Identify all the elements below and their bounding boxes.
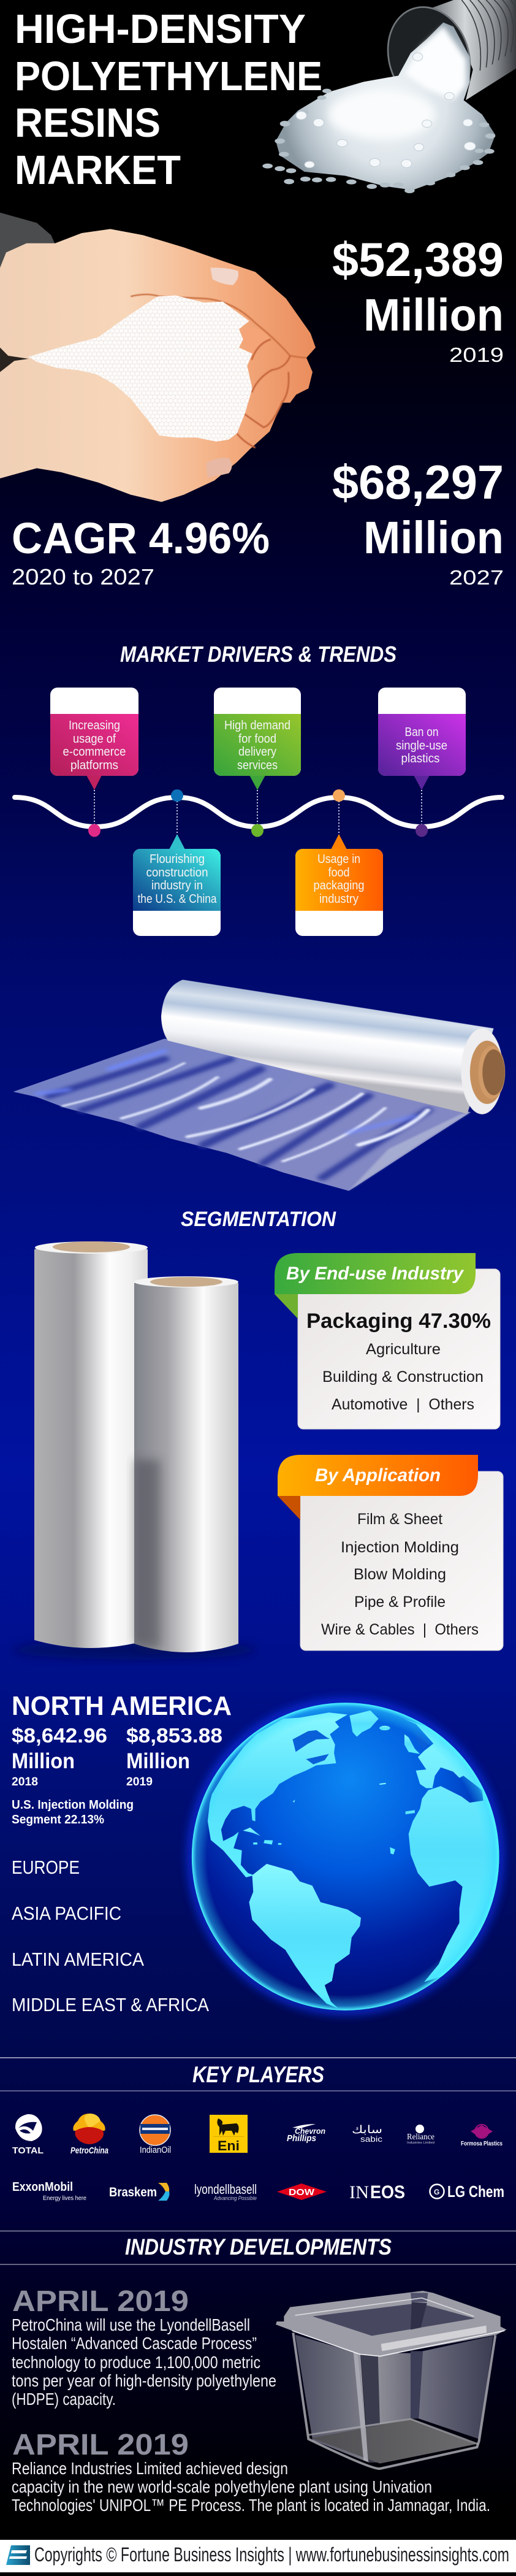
text: north america stats: $8,853.88 <box>126 1724 222 1747</box>
card: plastics ban: single-use <box>396 739 447 753</box>
card: food delivery: for food <box>238 732 276 746</box>
text: development two: APRIL 2019 <box>12 2429 189 2461</box>
panel: by application: Film & Sheet <box>357 1511 442 1528</box>
stat: 2019 market size <box>332 232 504 366</box>
logo: Formosa Plastics: Formosa Plastics <box>461 2141 503 2147</box>
logo: sabic: sabic <box>360 2134 383 2144</box>
icon: globe <box>186 1697 509 2016</box>
text: other regions: EUROPE <box>12 1857 80 1878</box>
card: construction: the U.S. & China <box>137 892 217 906</box>
logo: Eni <box>210 2115 248 2153</box>
text: development one: (HDPE) capacity. <box>12 2390 116 2409</box>
card: food delivery <box>214 688 301 790</box>
stat: 2027 market size: $68,297 <box>332 455 504 509</box>
card: e-commerce: e-commerce <box>63 745 126 759</box>
logo: LyondellBasell: Advancing Possible <box>213 2195 257 2201</box>
text: north america stats: NORTH AMERICA <box>12 1691 232 1721</box>
stat: 2027 market size <box>332 455 504 589</box>
bright pellet highlights <box>296 53 476 168</box>
logo: INEOS: EOS <box>370 2182 405 2202</box>
logo: Chevron Phillips: Chevron <box>295 2126 325 2136</box>
icon: Fortune Business Insights logo <box>6 2545 30 2565</box>
panel: by end-use industry: Automotive | Others <box>332 1396 474 1413</box>
logo: Braskem: Braskem <box>109 2185 157 2199</box>
panel: by application: Injection Molding <box>341 1539 459 1556</box>
card: e-commerce: platforms <box>70 759 118 772</box>
logo: IndianOil <box>140 2115 171 2155</box>
hudson bay <box>292 1730 330 1752</box>
iceland <box>379 1726 390 1730</box>
logo: LyondellBasell: lyondellbasell <box>194 2182 257 2197</box>
text: other regions: MIDDLE EAST & AFRICA <box>12 1994 209 2015</box>
card: food packaging: packaging <box>314 879 364 892</box>
logo: Dow: DOW <box>289 2187 315 2198</box>
stat: 2027 market size: 2027 <box>449 566 504 589</box>
text: other regions: ASIA PACIFIC <box>12 1903 121 1924</box>
panel: by end-use industry: By End-use Industry <box>286 1263 464 1284</box>
stat: CAGR: CAGR 4.96% <box>12 515 270 563</box>
tub walls <box>295 2335 493 2463</box>
north america <box>208 1712 347 1877</box>
logo: Dow <box>277 2183 327 2200</box>
logo: INEOS <box>349 2182 405 2202</box>
logo: sabic <box>352 2123 383 2144</box>
panel: by application <box>278 1455 503 1650</box>
card: food packaging: industry <box>319 892 359 906</box>
stat: 2027 market size: Million <box>363 512 504 563</box>
ribbed cup <box>375 0 516 118</box>
text: development two: Reliance Industries Limited achieved design <box>12 2459 288 2478</box>
logo: Chevron Phillips: Phillips <box>287 2133 316 2144</box>
atlantic islands <box>292 1783 415 1855</box>
logo: LyondellBasell <box>194 2182 257 2201</box>
text: north america stats: Segment 22.13% <box>12 1813 104 1827</box>
text: north america stats: Million <box>12 1749 75 1773</box>
logo: ExxonMobil: Energy lives here <box>43 2195 86 2202</box>
baltic sea <box>417 1736 430 1748</box>
panel: by application: Wire & Cables | Others <box>321 1621 479 1638</box>
logo: Reliance: Industries Limited <box>407 2141 434 2145</box>
card: construction: construction <box>146 866 208 880</box>
logo: PetroChina <box>70 2114 108 2156</box>
card: food delivery: High demand <box>224 719 290 732</box>
text: development one: PetroChina will use the LyondellBasell <box>12 2315 250 2334</box>
logo: Reliance: Reliance <box>407 2133 434 2142</box>
card: food delivery: delivery <box>238 745 276 759</box>
heading: segmentation: SEGMENTATION <box>181 1208 336 1231</box>
image: hands holding white pellets <box>0 213 316 502</box>
card: food packaging: food <box>328 866 349 880</box>
panel: by end-use industry <box>275 1253 500 1429</box>
logo: ExxonMobil: ExxonMobil <box>12 2180 73 2194</box>
text: north america stats: $8,642.96 <box>12 1724 107 1747</box>
text: development one: APRIL 2019 <box>12 2285 189 2318</box>
logo: Chevron Phillips <box>287 2124 325 2144</box>
panel: by end-use industry: Packaging 47.30% <box>306 1309 491 1333</box>
tub floor <box>311 2419 476 2464</box>
stat: CAGR: 2020 to 2027 <box>12 564 154 589</box>
caribbean islands <box>243 1828 281 1845</box>
logos: key players <box>12 2114 504 2202</box>
stat: 2019 market size: Million <box>363 289 504 340</box>
card: food delivery: services <box>237 759 278 772</box>
roll body <box>161 979 494 1114</box>
gulf of st lawrence <box>306 1754 329 1765</box>
card: e-commerce: usage of <box>73 732 116 746</box>
card: construction <box>133 834 221 936</box>
title: HIGH-DENSITY <box>15 6 306 52</box>
unrolled film sheet <box>13 1038 471 1191</box>
logo: Reliance <box>407 2125 434 2145</box>
logo: LG Chem: G <box>434 2188 439 2196</box>
roll end face <box>461 1029 503 1114</box>
stat: 2019 market size: 2019 <box>449 343 504 366</box>
card: e-commerce <box>50 688 138 790</box>
europe and africa <box>403 1719 509 1982</box>
text: north america stats: 2019 <box>126 1776 153 1788</box>
connector lines <box>94 790 422 835</box>
title: MARKET <box>15 147 181 193</box>
text: other regions <box>12 1857 209 2015</box>
title: RESINS <box>15 100 161 146</box>
text: development two: capacity in the new world-scale polyethylene plant using Univation <box>12 2477 432 2496</box>
logo: INEOS: IN <box>349 2182 369 2202</box>
title <box>15 6 322 193</box>
text: development one: tons per year of high-density polyethylene <box>12 2371 276 2390</box>
text: development one <box>12 2285 276 2409</box>
card: construction: industry in <box>151 879 203 892</box>
text: development two <box>12 2429 490 2515</box>
card: e-commerce: Increasing <box>69 719 120 732</box>
heading: key players: KEY PLAYERS <box>192 2062 324 2087</box>
heading: market drivers: MARKET DRIVERS & TRENDS <box>120 642 396 667</box>
logo: Eni: Eni <box>218 2138 240 2153</box>
text: development one: Hostalen “Advanced Cascade Process” <box>12 2334 257 2353</box>
logo: Total: TOTAL <box>12 2145 44 2156</box>
footer <box>0 2540 516 2572</box>
logo: PetroChina: PetroChina <box>70 2145 108 2156</box>
greenland <box>349 1711 379 1737</box>
stat: 2019 market size: $52,389 <box>332 232 504 286</box>
small roll <box>134 1276 238 1652</box>
text: north america stats: Million <box>126 1749 190 1773</box>
tub edges <box>293 2333 495 2469</box>
panel: by application: Pipe & Profile <box>354 1593 446 1611</box>
uk <box>404 1735 420 1754</box>
card: plastics ban: Ban on <box>404 726 439 739</box>
card: food packaging: Usage in <box>317 853 360 866</box>
text: north america stats <box>12 1691 232 1827</box>
logo: ExxonMobil <box>12 2180 86 2202</box>
wave line <box>15 797 502 827</box>
large roll <box>34 1241 148 1648</box>
card: food packaging <box>295 834 383 936</box>
stat: CAGR <box>12 515 270 589</box>
image: two film rolls <box>12 1241 257 1660</box>
cardboard core <box>470 1041 505 1104</box>
image: pellets spilling from ribbed cup <box>262 0 516 193</box>
loose pellets <box>262 89 495 193</box>
text: north america stats: 2018 <box>12 1776 38 1788</box>
heading: industry developments: INDUSTRY DEVELOPMENTS <box>125 2234 392 2260</box>
logo: Formosa Plastics <box>461 2125 503 2147</box>
text: development one: technology to produce 1,100,000 metric <box>12 2353 260 2372</box>
card: construction: Flourishing <box>150 853 205 866</box>
logo: IndianOil: IndianOil <box>140 2145 171 2155</box>
logo: LG Chem <box>430 2182 504 2201</box>
image: clear plastic tub <box>276 2291 507 2469</box>
south america <box>249 1864 361 2008</box>
image: plastic film roll <box>13 979 505 1191</box>
text: north america stats: U.S. Injection Molding <box>12 1798 134 1812</box>
driver dots <box>88 789 428 837</box>
logo: Total <box>12 2114 44 2156</box>
card: plastics ban: plastics <box>401 752 440 765</box>
panel: by application: By Application <box>315 1465 441 1485</box>
card: plastics ban <box>378 688 466 790</box>
text: other regions: LATIN AMERICA <box>12 1949 144 1970</box>
title: POLYETHYLENE <box>15 53 322 99</box>
panel: by application: Blow Molding <box>354 1566 446 1583</box>
panel: by end-use industry: Agriculture <box>366 1341 441 1358</box>
logo: sabic: سابك <box>352 2123 382 2136</box>
panel: by end-use industry: Building & Construction <box>322 1368 484 1386</box>
tub rim <box>276 2291 507 2356</box>
timeline: drivers wave with cards <box>15 688 502 936</box>
pellet heap <box>276 23 495 190</box>
